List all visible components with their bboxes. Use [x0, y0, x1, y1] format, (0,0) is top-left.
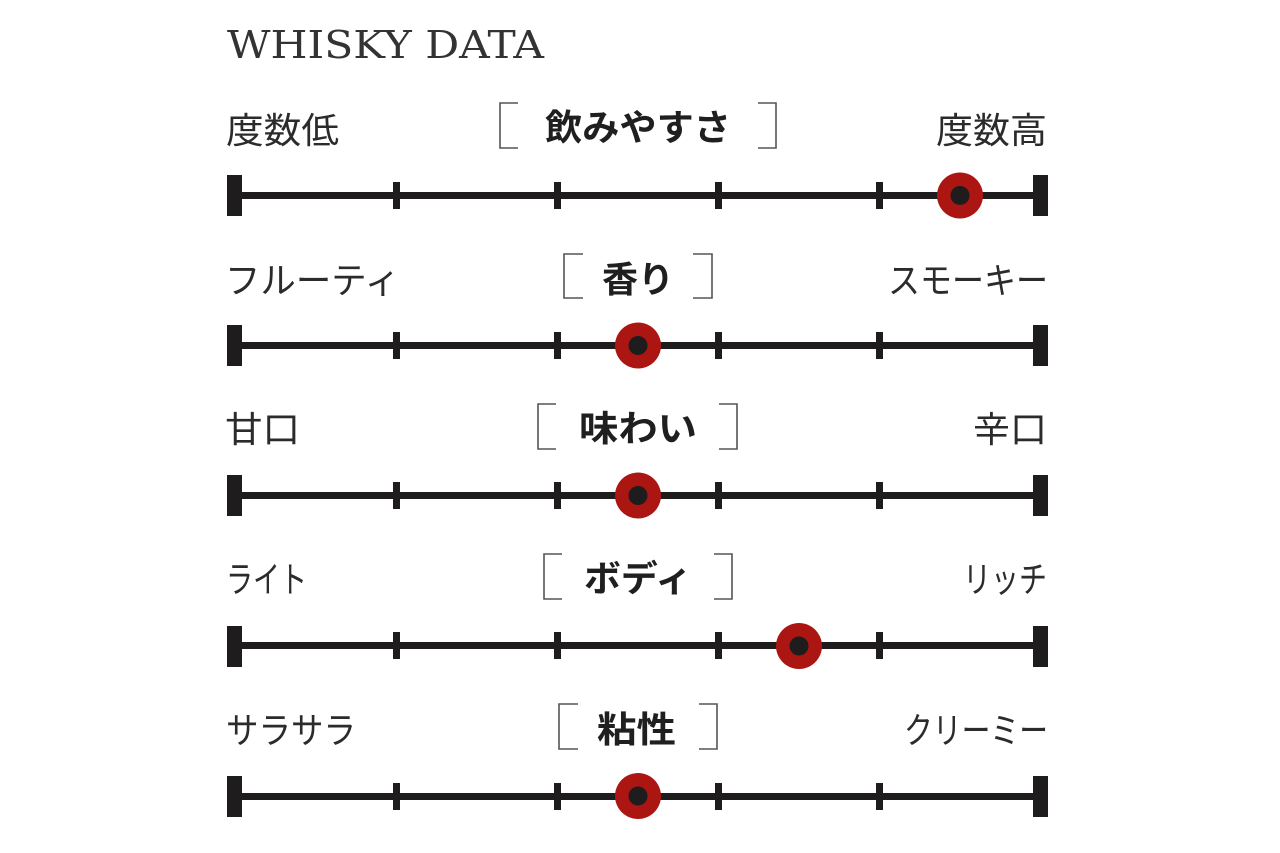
scale	[227, 322, 1048, 368]
heading	[538, 404, 737, 449]
right label: クリーミー	[904, 710, 1048, 751]
heading	[559, 704, 717, 750]
heading: 味わい	[579, 408, 697, 449]
row: 飲みやすさ	[226, 103, 1048, 218]
right label: 辛口	[973, 409, 1047, 450]
marker	[937, 172, 983, 218]
heading	[544, 554, 732, 599]
heading: 粘性	[597, 709, 676, 750]
scale	[227, 773, 1048, 819]
left label: 甘口	[225, 409, 300, 450]
right label: 度数高	[936, 110, 1047, 151]
right label: スモーキー	[888, 260, 1048, 301]
left label: 度数低	[226, 110, 339, 151]
marker	[615, 322, 661, 368]
marker	[776, 623, 822, 669]
row: 味わい	[225, 404, 1048, 518]
heading: 飲みやすさ	[545, 107, 731, 148]
heading: ボディ	[584, 558, 692, 599]
heading: 香り	[602, 259, 674, 300]
heading	[500, 103, 776, 148]
scale	[227, 172, 1048, 218]
title: WHISKY DATA	[227, 23, 545, 67]
scale	[227, 623, 1048, 669]
left label: ライト	[226, 559, 307, 600]
marker	[615, 472, 661, 518]
left label: フルーティ	[225, 260, 400, 301]
row: 粘性	[226, 704, 1048, 819]
scale	[227, 472, 1048, 518]
row: ボディ	[226, 554, 1048, 669]
left label: サラサラ	[226, 710, 356, 751]
marker	[615, 773, 661, 819]
right label: リッチ	[963, 559, 1047, 600]
heading	[564, 254, 712, 300]
row: 香り	[225, 254, 1048, 368]
